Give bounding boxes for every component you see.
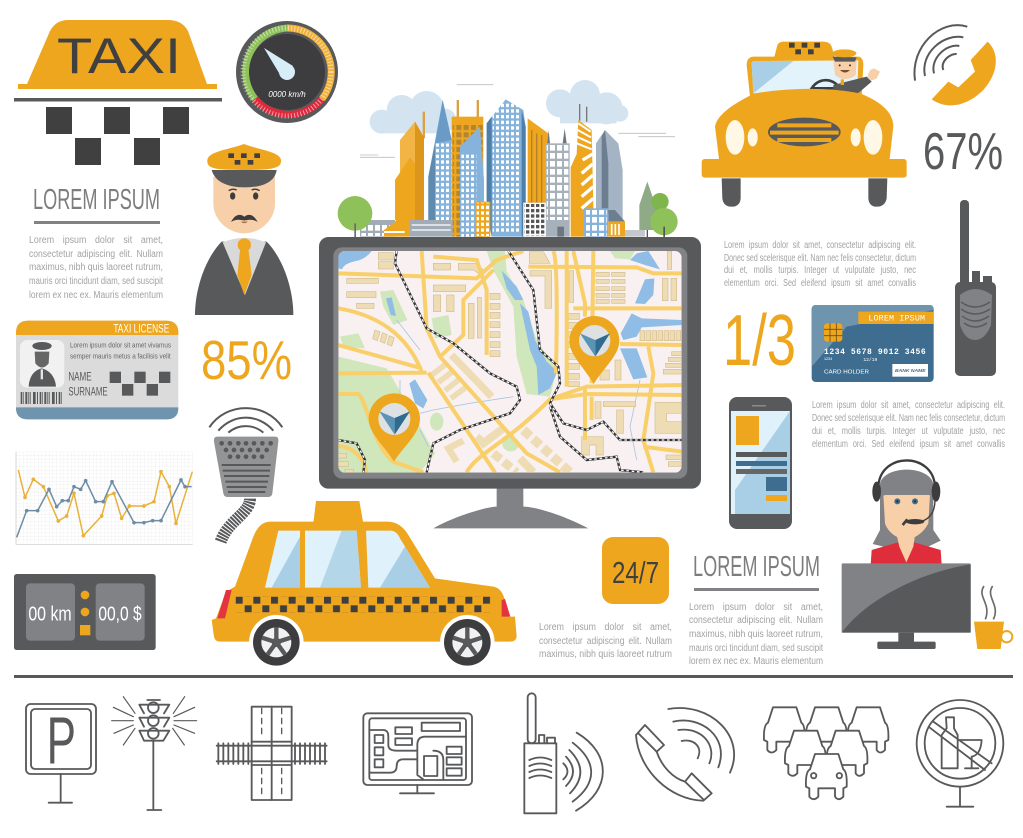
text block: right bottom paragraph: maximus, nibh quis laoreet rutrum, <box>689 629 823 640</box>
photo <box>20 340 64 388</box>
windshield <box>747 57 863 97</box>
text block: right bottom paragraph <box>689 602 823 667</box>
icon: traffic light <box>112 697 197 810</box>
roof sign <box>774 42 835 58</box>
speed lines <box>360 85 675 157</box>
monitor frame <box>319 237 701 489</box>
checker pattern <box>46 107 189 165</box>
sign body <box>27 20 207 84</box>
text block: top right paragraph: elementum orci. Sed eleifend ipsum sit amet convallis <box>724 278 916 289</box>
headlights <box>726 120 744 155</box>
taxi license card: semper mauris metus a facilisis velit <box>70 352 171 361</box>
text block: top right paragraph: Donec sed scelerisque elit. Nam nec felis consectetur, dictum <box>724 253 916 264</box>
wheels <box>722 178 741 207</box>
taxi license card <box>16 321 178 419</box>
taxi car side view <box>212 501 517 670</box>
credit card: 12/19 <box>863 357 878 363</box>
sign text: TAXI <box>57 28 181 84</box>
tower: orange middle <box>528 118 548 203</box>
credit card <box>812 305 934 382</box>
lights <box>217 590 232 618</box>
text block: left paragraph: lorem ex nec ex. Mauris elementum <box>29 290 163 301</box>
text block: top right paragraph: dui et, mollis turpis. Integer ut vulputate justo, nec <box>724 265 916 276</box>
credit card: 1234 <box>824 357 832 361</box>
credit card: BANK NAME <box>895 368 927 373</box>
text block: centre bottom paragraph: maximus, nibh quis laoreet rutrum <box>539 649 672 660</box>
badge: 24/7 <box>602 537 669 604</box>
badge: 24/7: 24/7 <box>612 555 659 590</box>
map roads <box>338 251 682 472</box>
tower: orange left <box>423 112 425 138</box>
text block: left paragraph: Lorem ipsum dolor sit amet, <box>29 235 163 246</box>
license text: Lorem ipsum dolor sit amet vivamus <box>70 340 171 349</box>
icon: phone with signal outline <box>636 708 734 801</box>
headset <box>878 460 935 487</box>
map parks <box>338 251 635 472</box>
taximeter: 00,0 $ <box>98 603 142 626</box>
map pin: right <box>569 316 619 384</box>
map pin: left <box>369 393 420 462</box>
icon: traffic jam cars <box>764 707 888 799</box>
series: orange <box>18 470 192 536</box>
icon: walkie talkie <box>955 200 996 376</box>
icon: orange phone <box>914 25 996 105</box>
text block: centre bottom paragraph: Lorem ipsum dolor sit amet, <box>539 622 672 633</box>
heading: right lorem ipsum: LOREM IPSUM <box>693 551 820 583</box>
map water <box>338 251 682 408</box>
map rail lines <box>338 251 682 472</box>
icon: taxi driver <box>195 144 293 315</box>
stat: 85 percent: 85% <box>201 329 292 391</box>
taxi roof sign <box>14 20 222 165</box>
eyes <box>894 498 900 504</box>
text block: right bottom paragraph: Lorem ipsum dolor sit amet, <box>689 602 823 613</box>
icon: map monitor <box>363 713 472 793</box>
license title: TAXI LICENSE <box>113 322 169 336</box>
icon: no alcohol sign <box>917 700 1003 807</box>
icon: walkie talkie outline <box>524 693 603 813</box>
monitor stand <box>433 487 588 528</box>
taxi front view with driver <box>702 42 907 207</box>
speedometer <box>236 21 338 123</box>
taximeter <box>14 574 156 650</box>
dispatcher operator <box>842 460 1012 649</box>
text block: right bottom paragraph: mauris orci tincidunt diam, sed suscipit <box>689 643 823 654</box>
hair <box>873 470 941 547</box>
license checks <box>110 372 170 396</box>
heading: left lorem ipsum: LOREM IPSUM <box>33 184 160 216</box>
tower: grey <box>596 130 623 220</box>
text block: top right paragraph <box>724 240 916 289</box>
tower: tall blue <box>487 99 526 237</box>
city skyline <box>338 80 678 237</box>
stat: 1/3: 1/3 <box>723 301 796 381</box>
icon: parking sign <box>26 704 96 803</box>
heading: right lorem ipsum <box>693 551 820 591</box>
icon: radio microphone <box>209 408 282 542</box>
text block: left paragraph <box>29 235 163 301</box>
barcode <box>21 380 63 416</box>
desktop monitor <box>842 563 971 633</box>
text block: top right paragraph: Lorem ipsum dolor sit amet, consectetur adipiscing elit. <box>724 240 916 251</box>
chip <box>824 323 842 342</box>
map buildings <box>338 251 682 473</box>
tower: orange striped <box>579 104 580 121</box>
bank name <box>892 364 928 377</box>
text block: centre bottom paragraph <box>539 622 672 660</box>
tower: grey-white <box>547 128 567 143</box>
tower: blue pair with orange behind <box>457 100 459 118</box>
icon: parking sign: P <box>47 704 76 778</box>
car body <box>212 522 517 642</box>
low buildings <box>476 202 490 237</box>
text block: left paragraph: consectetur adipiscing elit. Nullam <box>29 249 163 260</box>
grille <box>768 118 841 146</box>
icon: road and rail crossing <box>217 707 327 800</box>
needle <box>264 48 293 78</box>
credit card: LOREM IPSUM <box>868 314 925 324</box>
card numbers: 1234 5678 9012 3456 <box>824 348 926 357</box>
clouds <box>370 80 628 134</box>
face <box>883 495 930 539</box>
taxi license card: SURNAME <box>68 385 108 399</box>
checker stripe <box>236 597 491 612</box>
wheels <box>249 615 304 670</box>
text block: right bottom paragraph: consectetur adipiscing elit. Nullam <box>689 615 823 626</box>
map <box>338 251 682 473</box>
text block: centre bottom paragraph: consectetur adipiscing elit. Nullam <box>539 636 672 647</box>
series: blue <box>17 480 192 537</box>
heading: left lorem ipsum <box>33 184 160 224</box>
text block: left paragraph: mauris orci tincidunt diam, sed suscipit <box>29 276 163 287</box>
bumper <box>702 159 907 178</box>
monitor with city map <box>319 237 701 528</box>
shirt <box>871 540 942 565</box>
text block: middle right paragraph <box>812 400 1005 450</box>
trees <box>338 196 372 231</box>
windows <box>265 531 300 588</box>
credit card: CARD HOLDER <box>824 369 869 375</box>
taxi license card: NAME <box>68 369 92 383</box>
smartphone <box>729 397 792 529</box>
driver <box>812 49 880 95</box>
card label <box>858 312 934 324</box>
text block: right bottom paragraph: lorem ex nec ex. Mauris elementum <box>689 656 823 667</box>
text block: left paragraph: maximus, nibh quis laoreet rutrum, <box>29 262 163 273</box>
roof light <box>313 501 363 523</box>
coffee cup <box>974 622 1004 649</box>
taximeter: 00 km <box>28 603 72 626</box>
car body <box>715 89 893 162</box>
speed label: 0000 km/h <box>268 90 306 99</box>
line chart <box>16 452 193 544</box>
